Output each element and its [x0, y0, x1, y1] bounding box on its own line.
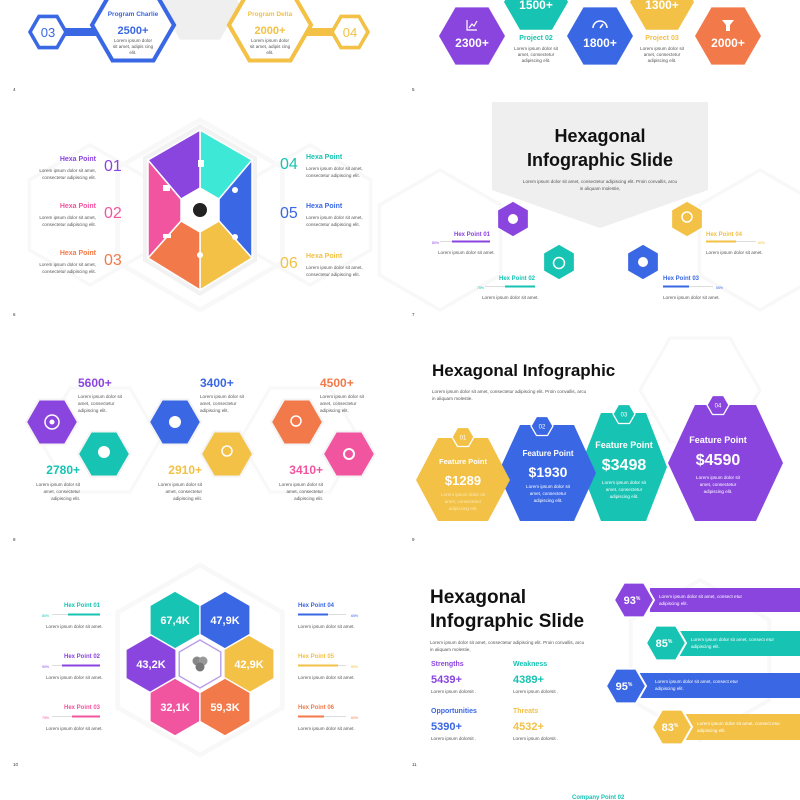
slide 6 labels: Hexa Point: [306, 253, 343, 260]
slide 9: feature points: Lorem ipsum dolor sit: [602, 480, 647, 485]
slide 10 labels: 65%: [351, 614, 358, 618]
slide 8: six hex stats: 5600+: [78, 376, 112, 390]
slide 8: six hex stats: Lorem ipsum dolor sit: [36, 482, 81, 487]
slide 9: feature points: Feature Point: [439, 457, 487, 466]
slide 4 partial: projects: 2300+: [455, 36, 489, 50]
slide 8: six hex stats: Lorem ipsum dolor sit: [200, 394, 245, 399]
slide 10 labels: 60%: [351, 716, 358, 720]
slide 3 partial: programs: elit.: [266, 50, 274, 55]
slide 3 partial: programs: [30, 0, 368, 61]
slide 6 labels: Hexa Point: [60, 156, 97, 163]
slide 11: percentage bars: 83: [662, 722, 674, 734]
slide 3 partial: programs: sit amet, adipis cing: [250, 44, 291, 49]
slide 6 labels: consectetur adipiscing elit.: [306, 173, 360, 178]
slide 8: six hex stats: Lorem ipsum dolor sit: [78, 394, 123, 399]
slide 11: percentage bars: adipiscing elit.: [691, 644, 720, 649]
slide 11: SWOT text: [430, 587, 585, 741]
slide 9: feature points: Lorem ipsum dolor sit: [696, 475, 741, 480]
slide 11: percentage bars: 93: [624, 595, 636, 607]
slide 7 hex points: Lorem ipsum dolor sit amet.: [706, 250, 763, 255]
slide 6 labels: Lorem ipsum dolor sit amet,: [39, 215, 96, 220]
slide 8: six hex stats: adipiscing elit.: [78, 408, 107, 413]
slide 3 partial: programs: Program Charlie: [108, 11, 159, 18]
slide 10 labels: Hex Point 01: [64, 603, 101, 609]
slide 11: percentage bars: %: [636, 596, 641, 602]
slide 6 labels: [39, 154, 363, 277]
slide 11: SWOT text: in aliquam molestie,: [430, 647, 471, 652]
slide 11: SWOT text: Threats: [513, 708, 538, 715]
slide 9: feature points: Lorem ipsum dolor sit amet, consectetur adipiscing elit. Proin convallis, arcu: [432, 389, 587, 394]
slide 9: feature points: amet, consectetur: [700, 482, 737, 487]
slide 10 labels: Hex Point 06: [298, 705, 335, 711]
slide 11: SWOT text: Lorem ipsum dolor sit amet, consectetur adipiscing elit. Proin convallis, arcu: [430, 640, 585, 645]
slide numbers: 8: [13, 537, 16, 542]
slide 8: six hex stats: amet, consectetur: [286, 489, 323, 494]
slide 6 labels: consectetur adipiscing elit.: [42, 175, 96, 180]
slide 7 hex points: Hex Point 03: [663, 276, 700, 282]
slide 9: feature points: adipiscing elit.: [610, 494, 638, 499]
slide 7 hex points: Hex Point 04: [706, 232, 743, 238]
slide 11: percentage bars: adipiscing elit.: [659, 601, 688, 606]
slide 4 partial: projects: adipiscing elit.: [522, 58, 550, 63]
slide 10 labels: Hex Point 04: [298, 603, 335, 609]
slide 8: six hex stats: adipiscing elit.: [294, 496, 323, 501]
slide 8: six hex stats: 2780+: [46, 463, 80, 477]
slide 9: feature points: 03: [621, 412, 628, 418]
slide 11: SWOT text: Lorem ipsum dolorsit .: [513, 689, 558, 694]
slide 10 labels: Hex Point 05: [298, 654, 335, 660]
slide 10 labels: Lorem ipsum dolor sit amet.: [46, 624, 103, 629]
slide 6 labels: Lorem ipsum dolor sit amet,: [39, 168, 96, 173]
slide 3 partial: programs: 03: [41, 25, 55, 40]
slide 11: percentage bars: adipiscing elit.: [655, 686, 684, 691]
slide 11: SWOT text: Opportunities: [431, 708, 477, 715]
slide 11: SWOT text: Lorem ipsum dolorsit .: [431, 689, 476, 694]
slide 4 partial: projects: Lorem ipsum dolor sit: [640, 46, 685, 51]
slide 3 partial: programs: Program Delta: [248, 11, 293, 18]
slide 8: six hex stats: 2910+: [168, 463, 202, 477]
slide 9: feature points: adipiscing elit.: [534, 498, 562, 503]
slide 9: feature points: $3498: [602, 457, 646, 474]
slide 10 labels: [42, 603, 358, 731]
slide 3 partial: programs: Lorem ipsum dolor: [114, 38, 152, 43]
slide 3 partial: programs: 2000+: [255, 25, 285, 37]
slide 8: six hex stats: adipiscing elit.: [173, 496, 202, 501]
slide 9: feature points: Lorem ipsum dolor sit: [441, 492, 486, 497]
slide 9: feature points: Feature Point: [689, 435, 747, 445]
slide 9: feature points: 04: [715, 404, 722, 410]
slide 6 labels: Lorem ipsum dolor sit amet,: [39, 262, 96, 267]
slide 10 labels: Hex Point 03: [64, 705, 101, 711]
slide 7 hex points: 80%: [432, 241, 439, 245]
slide 10 labels: Lorem ipsum dolor sit amet.: [298, 624, 355, 629]
slide 11: SWOT text: Lorem ipsum dolorsit .: [431, 736, 476, 741]
slide 8: six hex stats: amet, consectetur: [78, 401, 115, 406]
slide 6 labels: Hexa Point: [306, 203, 343, 210]
slide numbers: 9: [412, 537, 415, 542]
slide 9: feature points: [416, 361, 783, 521]
slide 11: percentage bars: %: [628, 682, 633, 688]
slide 4 partial: projects: adipiscing elit.: [648, 58, 676, 63]
slide 7: shield title: in aliquam molestie,: [580, 186, 620, 191]
slide 8: six hex stats: 4500+: [320, 376, 354, 390]
slide 9: feature points: $1930: [529, 464, 568, 480]
slide 9: feature points: amet, consectetur: [445, 499, 482, 504]
slide 6 labels: Hexa Point: [60, 250, 97, 257]
slide 6 labels: consectetur adipiscing elit.: [42, 222, 96, 227]
slide 6 labels: Lorem ipsum dolor sit amet,: [306, 265, 363, 270]
slide 6 labels: consectetur adipiscing elit.: [306, 272, 360, 277]
slide 10 labels: Hex Point 02: [64, 654, 101, 660]
slide 8: six hex stats: Lorem ipsum dolor sit: [320, 394, 365, 399]
slide numbers: 6: [13, 312, 16, 317]
slide 11: percentage bars: adipiscing elit.: [697, 728, 726, 733]
slide 11: SWOT text: 5439+: [431, 674, 462, 686]
slide 11: percentage bars: Lorem ipsum dolor sit amet, consect etur: [691, 637, 774, 642]
slide 6: pinwheel hexagon: [143, 124, 257, 296]
slide 9: feature points: $4590: [696, 452, 740, 469]
slide 8: six hex stats: 3410+: [289, 463, 323, 477]
slide 11: percentage bars: %: [674, 723, 679, 729]
slide 10 labels: 80%: [42, 614, 49, 618]
slide 9: feature points: adipiscing elit.: [449, 506, 477, 511]
slide numbers: 11: [412, 762, 417, 767]
slide 9: feature points: adipiscing elit.: [704, 489, 732, 494]
slide 8: six hex stats: amet, consectetur: [200, 401, 237, 406]
slide 9: feature points: in aliquam molestie.: [432, 396, 473, 401]
slide 9: feature points: Hexagonal Infographic: [432, 361, 615, 380]
slide 8: six hex stats: amet, consectetur: [43, 489, 80, 494]
slide 10: honeycomb: [126, 591, 274, 736]
slide 7 hex points: 60%: [758, 241, 765, 245]
slide 3 partial: programs: 04: [343, 25, 357, 40]
slide numbers: 10: [13, 762, 19, 767]
slide 8: six hex stats: adipiscing elit.: [320, 408, 349, 413]
slide 6 labels: 06: [280, 255, 298, 272]
slide 8: six hex stats: Lorem ipsum dolor sit: [158, 482, 203, 487]
slide 9: feature points: Feature Point: [595, 440, 653, 450]
slide 11: percentage bars: Lorem ipsum dolor sit amet, consect etur: [659, 594, 742, 599]
slide 6 labels: consectetur adipiscing elit.: [306, 222, 360, 227]
slide 11: SWOT text: Strengths: [431, 661, 464, 668]
slide 10 labels: 85%: [351, 665, 358, 669]
slide 3 partial: programs: 2500+: [118, 25, 148, 37]
slide 8: six hex stats: 3400+: [200, 376, 234, 390]
slide 7: shield title: Hexagonal: [554, 126, 646, 146]
slide 10 labels: Lorem ipsum dolor sit amet.: [46, 726, 103, 731]
slide 7: shield title: [492, 102, 708, 228]
slide 9: feature points: 02: [539, 424, 546, 430]
slide 7 hex points: 65%: [716, 286, 723, 290]
slide 8: six hex stats: amet, consectetur: [320, 401, 357, 406]
slide 10: honeycomb: 32,1K: [160, 702, 190, 714]
slide 10 labels: Lorem ipsum dolor sit amet.: [298, 675, 355, 680]
slide 6 labels: Lorem ipsum dolor sit amet,: [306, 215, 363, 220]
slide 3 partial: programs: Lorem ipsum dolor: [251, 38, 289, 43]
slide 9: feature points: Feature Point: [522, 449, 574, 458]
slide 7: shield title: Infographic Slide: [527, 150, 673, 170]
slide 7 hex points: Lorem ipsum dolor sit amet.: [438, 250, 495, 255]
slide 6 labels: 05: [280, 205, 298, 222]
slide 6 labels: Hexa Point: [306, 154, 343, 161]
slide numbers: 7: [412, 312, 415, 317]
slide 7 hex points: Hex Point 01: [454, 232, 491, 238]
slide 4 partial: projects: amet, consectetur: [518, 52, 555, 57]
slide 8: six hex stats: amet, consectetur: [165, 489, 202, 494]
slide 4 partial: projects: Project 02: [519, 35, 553, 42]
slide 10 labels: Lorem ipsum dolor sit amet.: [298, 726, 355, 731]
slide 9: feature points: amet, consectetur: [530, 491, 567, 496]
slide 7 hex points: Lorem ipsum dolor sit amet.: [482, 295, 539, 300]
slide 8: six hex stats: [26, 376, 375, 501]
slide 6 labels: 01: [104, 158, 122, 175]
slide 6 labels: 03: [104, 252, 122, 269]
slide 3 partial: programs: sit amet, adipis cing: [113, 44, 154, 49]
slide 4 partial: projects: 1800+: [583, 36, 617, 50]
slide 9: feature points: Lorem ipsum dolor sit: [526, 484, 571, 489]
slide 11: SWOT text: Infographic Slide: [430, 611, 584, 632]
slide 9: feature points: 01: [460, 436, 467, 442]
slide 10: honeycomb: 43,2K: [136, 659, 166, 671]
slide 10 labels: 90%: [42, 665, 49, 669]
slide 11: percentage bars: Lorem ipsum dolor sit amet, consect etur: [697, 721, 780, 726]
slide 11: percentage bars: Lorem ipsum dolor sit amet, consect etur: [655, 679, 738, 684]
slide 4 partial: projects: amet, consectetur: [644, 52, 681, 57]
slide 8: six hex stats: adipiscing elit.: [51, 496, 80, 501]
slide 10: honeycomb: 42,9K: [234, 659, 264, 671]
slide 4 partial: projects: 2000+: [711, 36, 745, 50]
slide 7 hex points: 75%: [477, 286, 484, 290]
slide 11: SWOT text: 4389+: [513, 674, 544, 686]
slide 11: percentage bars: [606, 583, 800, 744]
slide 11: percentage bars: 95: [616, 681, 628, 693]
slide 6 labels: Lorem ipsum dolor sit amet,: [306, 166, 363, 171]
slide 10: honeycomb: 59,3K: [210, 702, 240, 714]
slide 11: SWOT text: 5390+: [431, 721, 462, 733]
slide 4 partial: projects: [439, 0, 761, 65]
slide 4 partial: projects: Lorem ipsum dolor sit: [514, 46, 559, 51]
slide 9: feature points: amet, consectetur: [606, 487, 643, 492]
slide 11: SWOT text: 4532+: [513, 721, 544, 733]
slide 9: feature points: $1289: [445, 473, 481, 488]
background hex pattern: [29, 120, 800, 755]
slide 10: honeycomb: 67,4K: [160, 615, 190, 627]
slide 6 labels: 04: [280, 156, 298, 173]
slide 11: percentage bars: %: [668, 639, 673, 645]
slide 6 labels: Hexa Point: [60, 203, 97, 210]
slide 11: SWOT text: Hexagonal: [430, 587, 526, 608]
slide 7: shield title: Lorem ipsum dolor sit amet, consectetur adipiscing elit. Proin convallis, arcu: [523, 179, 678, 184]
slide 7 hex points: [432, 201, 765, 300]
slide numbers: 4: [13, 87, 16, 92]
slide 10: honeycomb: 47,9K: [210, 615, 240, 627]
slide 6 labels: 02: [104, 205, 122, 222]
slide 8: six hex stats: Lorem ipsum dolor sit: [279, 482, 324, 487]
slide 10 labels: 75%: [42, 716, 49, 720]
slide 4 partial: projects: Project 03: [645, 35, 679, 42]
slide 10 labels: Lorem ipsum dolor sit amet.: [46, 675, 103, 680]
slide 7 hex points: Hex Point 02: [499, 276, 536, 282]
slide numbers: 5: [412, 87, 415, 92]
slide 6 labels: consectetur adipiscing elit.: [42, 269, 96, 274]
slide 7 hex points: Lorem ipsum dolor sit amet.: [663, 295, 720, 300]
slide 11: percentage bars: 85: [656, 638, 668, 650]
slide 11: SWOT text: Lorem ipsum dolorsit .: [513, 736, 558, 741]
slide 8: six hex stats: adipiscing elit.: [200, 408, 229, 413]
slide numbers: [13, 87, 417, 767]
slide 3 partial: programs: elit.: [129, 50, 137, 55]
slide 11: SWOT text: Weakness: [513, 661, 547, 668]
